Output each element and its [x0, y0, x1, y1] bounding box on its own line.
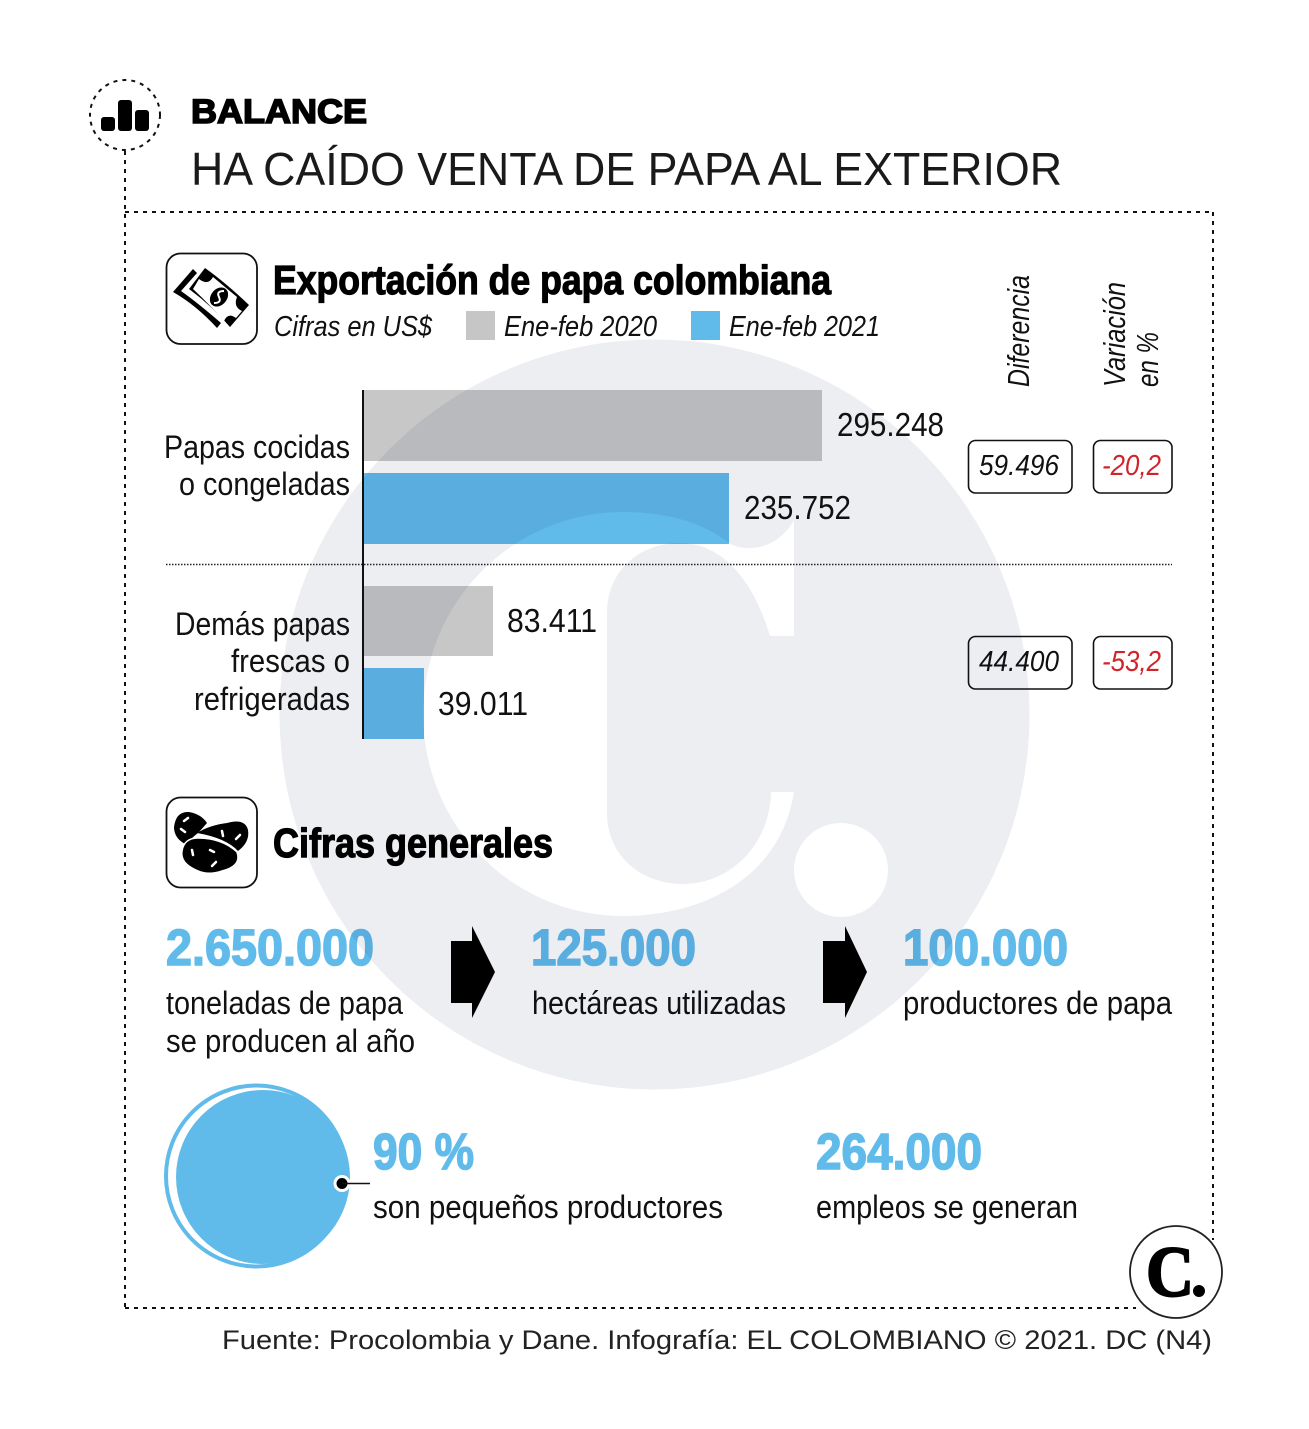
- stat: jobs: 264.000: [816, 1123, 982, 1180]
- bar: Papas cocidas 2021: [364, 473, 729, 544]
- value labels: [438, 406, 944, 722]
- stat: hectares: hectáreas utilizadas: [532, 985, 786, 1021]
- bar: Demás papas 2021: [364, 668, 424, 739]
- value labels: 295.248: [837, 406, 944, 443]
- value labels: 39.011: [438, 685, 528, 722]
- chart: 90 % circle: [166, 1086, 370, 1266]
- logo: [1130, 1226, 1222, 1318]
- stat: small producers: 90 %: [373, 1123, 474, 1180]
- bar: Papas cocidas 2020: [364, 390, 822, 461]
- icon: bar chart in dotted circle: [90, 80, 160, 150]
- dotted frame: [125, 151, 1213, 1308]
- table: difference and variation: -53,2: [1102, 646, 1161, 678]
- stat: tons: [166, 919, 415, 1059]
- category labels: Papas cocidas: [164, 429, 350, 465]
- icon: money bills: [166, 254, 257, 344]
- heading: general figures: Cifras generales: [273, 820, 553, 866]
- legend: Ene-feb 2021: [729, 311, 880, 343]
- arrow: [451, 926, 495, 1018]
- kicker: BALANCE: BALANCE: [191, 93, 367, 131]
- category labels: o congeladas: [179, 466, 350, 502]
- heading: export chart: Exportación de papa colombiana: [273, 257, 832, 303]
- arrow: [823, 926, 867, 1018]
- logo: C: [1146, 1232, 1194, 1312]
- stat: jobs: empleos se generan: [816, 1189, 1078, 1225]
- value labels: 235.752: [744, 489, 851, 526]
- icon: potatoes: [166, 798, 257, 888]
- stat: small producers: son pequeños productores: [373, 1189, 723, 1225]
- stat: small producers: [373, 1123, 723, 1225]
- legend: [274, 311, 880, 343]
- table: difference and variation: 44.400: [979, 646, 1059, 678]
- stat: tons: 2.650.000: [166, 919, 374, 976]
- category labels: [164, 429, 350, 717]
- column headers: Diferencia: [1001, 275, 1036, 387]
- value labels: 83.411: [507, 602, 597, 639]
- stat: hectares: 125.000: [531, 919, 696, 976]
- table: difference and variation: -20,2: [1102, 450, 1161, 482]
- column headers: Variación: [1097, 282, 1132, 387]
- table: difference and variation: 59.496: [979, 450, 1060, 482]
- column headers: [1001, 275, 1165, 387]
- watermark: El Colombiano logo: [280, 340, 1030, 1090]
- category labels: frescas o: [231, 643, 350, 679]
- stat: hectares: [531, 919, 786, 1021]
- legend: Cifras en US$: [274, 311, 433, 343]
- title: HA CAÍDO VENTA DE PAPA AL EXTERIOR: [191, 143, 1062, 195]
- stat: producers: 100.000: [903, 919, 1068, 976]
- stat: producers: [903, 919, 1172, 1021]
- stat: jobs: [816, 1123, 1078, 1225]
- legend: Ene-feb 2020: [504, 311, 657, 343]
- column headers: en %: [1130, 332, 1165, 387]
- bar chart: [164, 390, 1172, 739]
- category labels: refrigeradas: [194, 681, 350, 717]
- bar: Demás papas 2020: [364, 586, 493, 656]
- stat: producers: productores de papa: [903, 985, 1172, 1021]
- stat: tons: toneladas de papa: [166, 985, 403, 1021]
- source credit: Fuente: Procolombia y Dane. Infografía: EL COLOMBIANO © 2021. DC (N4): [222, 1325, 1212, 1355]
- table: difference and variation: [968, 440, 1172, 689]
- stat: tons: se producen al año: [166, 1023, 415, 1059]
- category labels: Demás papas: [175, 606, 350, 642]
